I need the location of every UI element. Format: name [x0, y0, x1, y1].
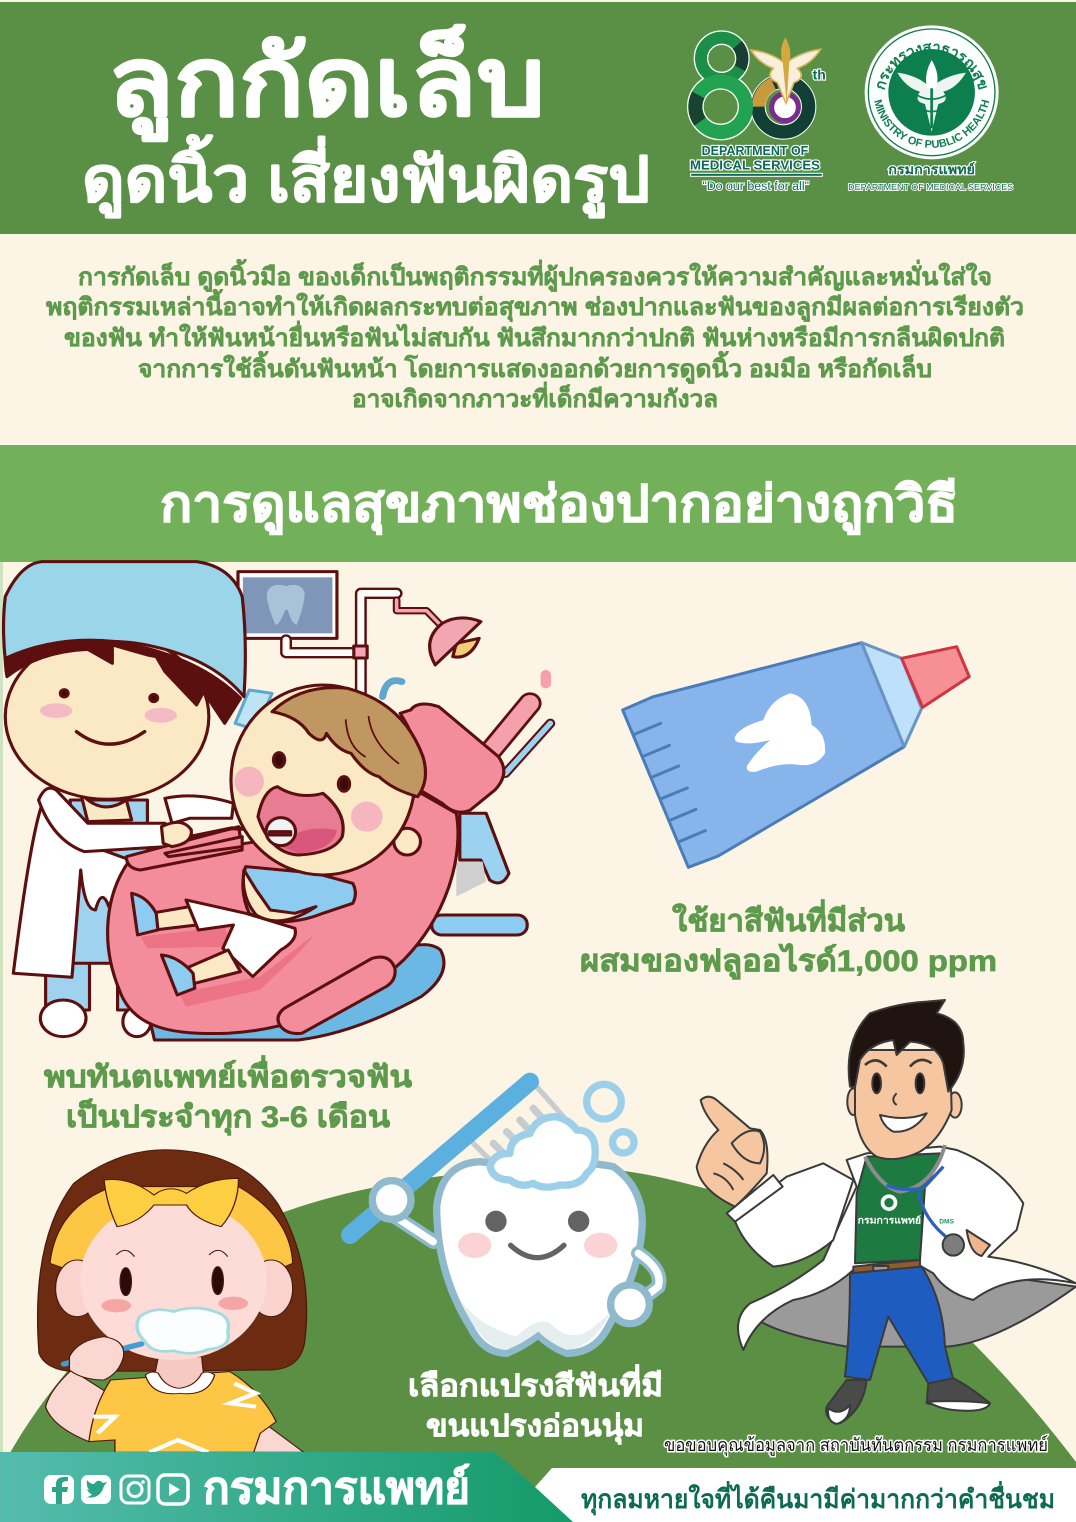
intro paragraph: พฤติกรรมเหล่านี้อาจทำให้เกิดผลกระทบต่อสุขภาพ ช่องปากและฟันของลูกมีผลต่อการเรียงตัว — [46, 288, 1024, 323]
intro paragraph: ของฟัน ทำให้ฟันหน้ายื่นหรือฟันไม่สบกัน ฟันสึกมากกว่าปกติ ฟันห่างหรือมีการกลืนผิดปกติ — [64, 320, 1005, 352]
doctor stethoscope and hand — [865, 1145, 990, 1256]
title — [82, 24, 650, 218]
label: soft brush: ขนแปรงอ่อนนุ่ม — [426, 1410, 644, 1445]
footer: social bar: กรมการแพทย์ — [203, 1463, 470, 1513]
logo: 80th department of medical services: MEDICAL SERVICES — [690, 157, 820, 172]
credits: ขอขอบคุณข้อมูลจาก สถาบันทันตกรรม กรมการแพทย์ — [664, 1435, 1048, 1456]
footer: social bar — [0, 1452, 575, 1522]
label: toothpaste: ใช้ยาสีฟันที่มีส่วน — [672, 899, 905, 938]
logo: ministry of public health seal — [848, 25, 1014, 192]
logo: 80th department of medical services — [690, 37, 826, 193]
logo: ministry of public health seal: DEPARTMENT OF MEDICAL SERVICES — [848, 182, 1014, 192]
label: see dentist: พบทันตแพทย์เพื่อตรวจฟัน — [44, 1055, 413, 1094]
girl dress — [46, 1357, 304, 1452]
dentist body and coat — [13, 788, 233, 1037]
footer: slogan ribbon — [535, 1468, 1076, 1522]
x-ray monitor — [238, 572, 337, 638]
toothbrush — [350, 1082, 563, 1235]
header band — [0, 2, 1076, 234]
doctor cape — [738, 1147, 1076, 1350]
logo: 80th department of medical services: th — [813, 66, 826, 82]
tooth body — [437, 1162, 642, 1353]
doctor shirt — [853, 1153, 955, 1275]
girl face — [80, 1200, 267, 1360]
intro paragraph: การกัดเล็บ ดูดนิ้วมือ ของเด็กเป็นพฤติกรรมที่ผู้ปกครองควรให้ความสำคัญและหมั่นใส่ใจ — [78, 258, 992, 292]
dental lamp arm — [286, 593, 481, 693]
illustration: doctor mascot — [697, 1000, 1076, 1424]
illustration: tooth mascot with toothbrush — [350, 1082, 659, 1353]
illustration: girl brushing teeth — [38, 1150, 307, 1452]
dentist head with cap — [4, 562, 245, 799]
girl hair — [38, 1150, 307, 1372]
doctor head — [847, 1000, 964, 1159]
child body — [132, 867, 355, 995]
intro paragraph: จากการใช้ลิ้นดันฟันหน้า โดยการแสดงออกด้วยการดูดนิ้ว อมมือ หรือกัดเล็บ — [138, 350, 932, 384]
girl toothbrush foam and hand — [64, 1308, 229, 1380]
logo: 80th department of medical services: DEPARTMENT OF — [702, 143, 808, 158]
girl headband and ears — [50, 1187, 293, 1317]
doctor shirt: DMS — [939, 1218, 955, 1225]
doctor shirt: กรมการแพทย์ — [858, 1214, 921, 1225]
intro paragraph: อาจเกิดจากภาวะที่เด็กมีความกังวล — [352, 381, 718, 413]
dental chair — [108, 704, 504, 1034]
tooth foam and bubbles — [490, 1084, 634, 1187]
logo: ministry of public health seal: MINISTRY OF PUBLIC HEALTH — [874, 99, 990, 148]
logo: ministry of public health seal: กระทรวงสาธารณสุข — [877, 42, 987, 90]
section heading band — [0, 445, 1076, 562]
tooth face — [458, 1211, 617, 1350]
label: toothpaste: ผสมของฟลูออไรด์1,000 ppm — [580, 943, 997, 980]
child head — [231, 685, 426, 875]
chair back equipment — [151, 675, 550, 1040]
logo: 80th department of medical services: "Do our best for all" — [702, 179, 809, 193]
hill background — [5, 1167, 1076, 1522]
icon: toothpaste tube — [623, 643, 969, 867]
title: ดูดนิ้ว เสี่ยงฟันผิดรูป — [82, 134, 650, 218]
intro paragraph — [46, 258, 1024, 413]
footer: slogan ribbon: ทุกลมหายใจที่ได้คืนมามีค่ามากกว่าคำชื่นชม — [581, 1480, 1055, 1516]
label: soft brush: เลือกแปรงสีฟันที่มี — [408, 1364, 663, 1403]
illustration: dentist and child in chair — [4, 562, 550, 1040]
label: see dentist: เป็นประจำทุก 3-6 เดือน — [66, 1098, 391, 1136]
doctor raised arm — [697, 1097, 853, 1267]
doctor pants and shoes — [826, 1267, 990, 1424]
tooth arms and hands — [372, 1181, 659, 1324]
label: toothpaste — [580, 899, 997, 980]
section heading band: การดูแลสุขภาพช่องปากอย่างถูกวิธี — [160, 476, 958, 535]
label: see dentist — [44, 1055, 413, 1136]
dental mirror tool and hand — [161, 690, 272, 857]
girl bow — [104, 1178, 239, 1227]
logo: ministry of public health seal: กรมการแพทย์ — [888, 162, 975, 177]
label: soft brush — [408, 1364, 663, 1445]
social icons — [44, 1475, 188, 1504]
title: ลูกกัดเล็บ — [108, 24, 545, 142]
